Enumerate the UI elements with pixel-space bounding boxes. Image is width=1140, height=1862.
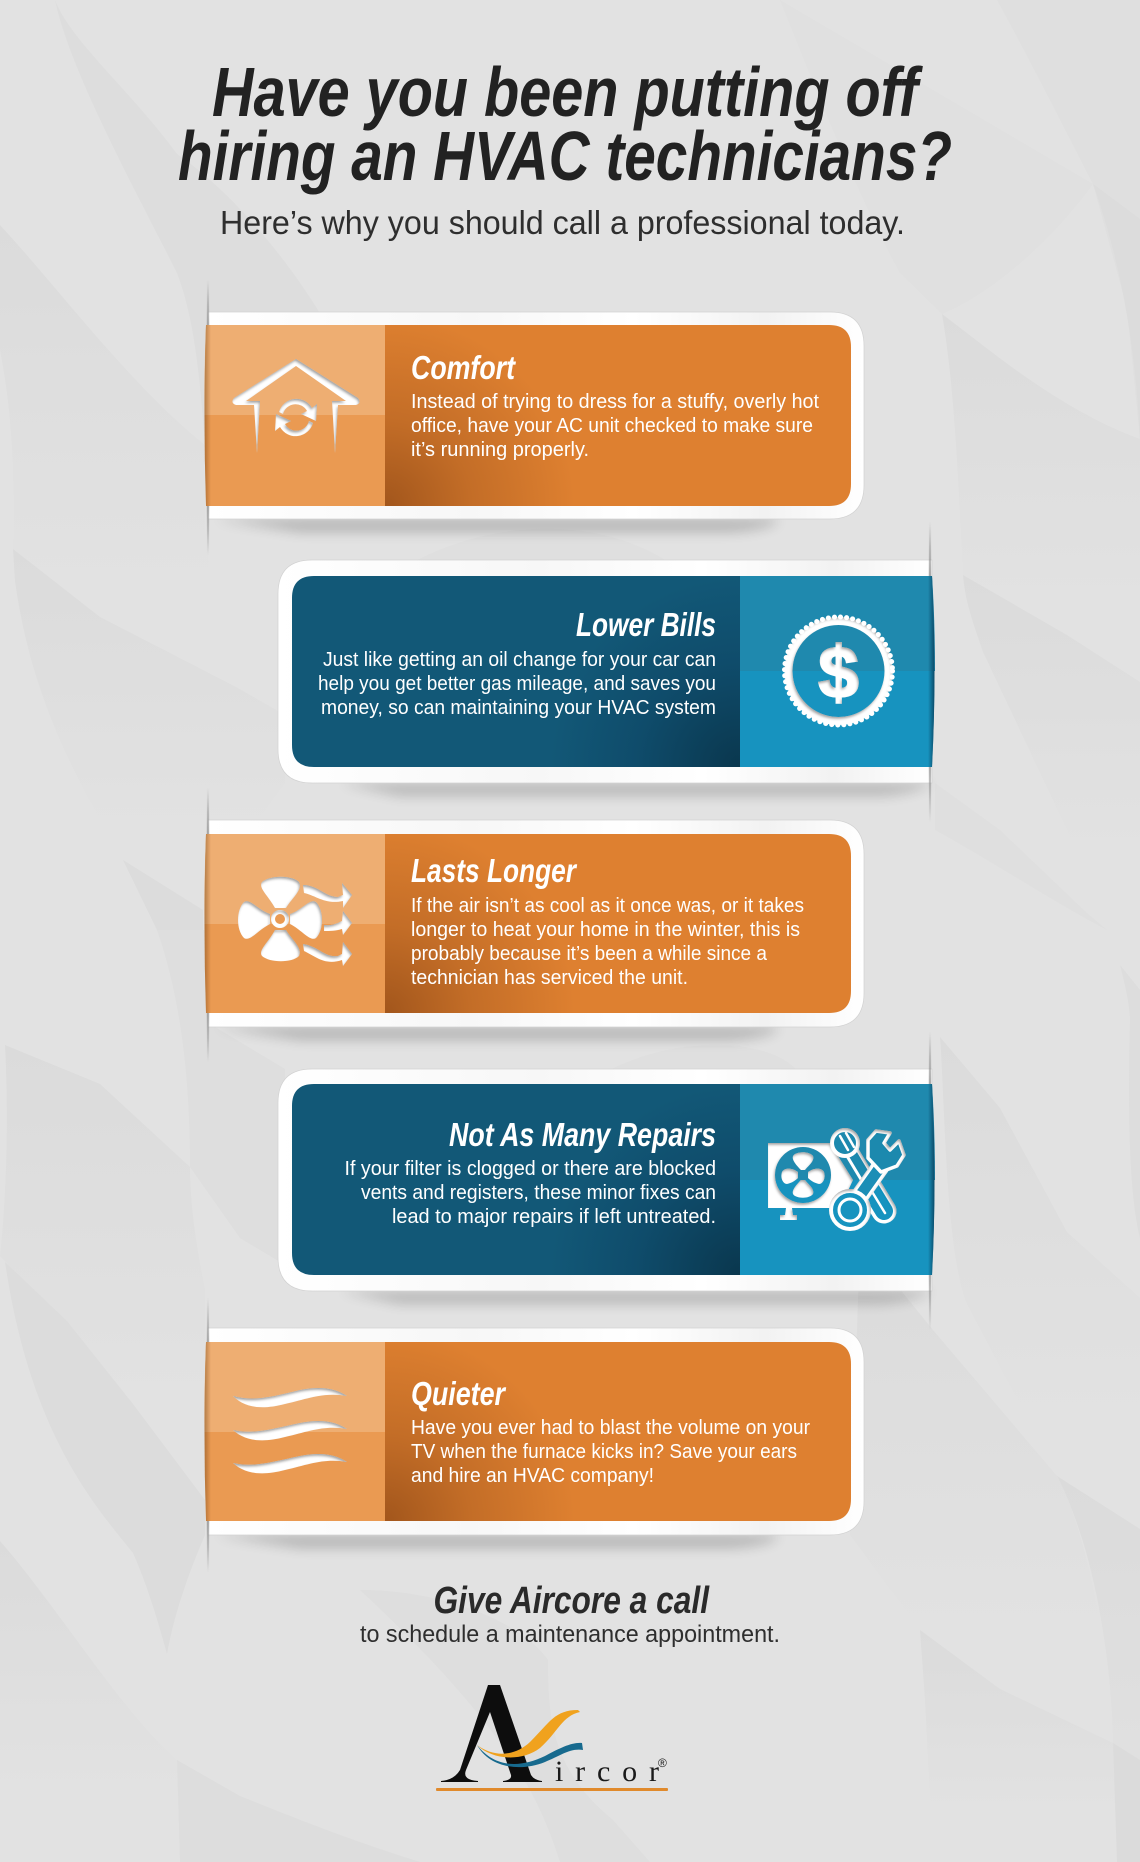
text block: and hire an HVAC company!	[411, 1465, 654, 1487]
icon: house with circular arrows	[232, 359, 360, 453]
heading: Comfort	[411, 349, 517, 386]
text block: help you get better gas mileage, and saves you	[318, 673, 716, 695]
call to action	[360, 1580, 780, 1648]
text block	[318, 649, 716, 719]
text block: office, have your AC unit checked to make sure	[411, 415, 813, 437]
icon: outdoor unit with wrench and screwdriver	[768, 1130, 904, 1229]
text block	[411, 1417, 810, 1487]
panel: quieter	[204, 1298, 864, 1572]
logo: Aircor: ircor	[555, 1755, 659, 1788]
text block: vents and registers, these minor fixes can	[361, 1182, 716, 1204]
panel: not as many repairs	[278, 1032, 935, 1330]
text block: money, so can maintaining your HVAC system	[321, 697, 716, 719]
logo: Aircor	[436, 1685, 668, 1791]
logo: Aircor: ®	[658, 1756, 667, 1770]
text block	[411, 391, 819, 461]
text block: TV when the furnace kicks in? Save your ears	[411, 1441, 797, 1463]
subtitle: Here’s why you should call a professional today.	[220, 204, 905, 241]
icon: dollar coin: $	[818, 633, 859, 713]
heading: Lower Bills	[576, 606, 716, 643]
text block: If your filter is clogged or there are blocked	[344, 1158, 716, 1180]
text block: Instead of trying to dress for a stuffy, overly hot	[411, 391, 819, 413]
text block: Have you ever had to blast the volume on your	[411, 1417, 810, 1439]
text block: Just like getting an oil change for your car can	[323, 649, 716, 671]
icon: sound waves	[233, 1388, 347, 1473]
text block: it’s running properly.	[411, 439, 589, 461]
text block: longer to heat your home in the winter, this is	[411, 919, 800, 941]
heading: Not As Many Repairs	[449, 1116, 716, 1153]
icon: fan with airflow arrows	[238, 877, 352, 966]
panel: comfort	[204, 280, 864, 555]
text block	[411, 895, 804, 989]
title: Have you been putting off	[212, 53, 923, 131]
heading: Quieter	[411, 1375, 507, 1412]
text block: probably because it’s been a while since a	[411, 943, 768, 965]
title: hiring an HVAC technicians?	[178, 117, 952, 195]
text block: lead to major repairs if left untreated.	[392, 1206, 716, 1228]
title	[178, 53, 952, 195]
heading: Lasts Longer	[411, 852, 578, 889]
call to action: to schedule a maintenance appointment.	[360, 1621, 780, 1648]
text block: technician has serviced the unit.	[411, 967, 688, 989]
call to action: Give Aircore a call	[434, 1580, 710, 1622]
icon: dollar coin	[784, 617, 893, 725]
panel: lasts longer	[204, 788, 864, 1062]
text block	[344, 1158, 716, 1228]
text block: If the air isn’t as cool as it once was, or it takes	[411, 895, 804, 917]
panel: lower bills	[278, 522, 935, 822]
